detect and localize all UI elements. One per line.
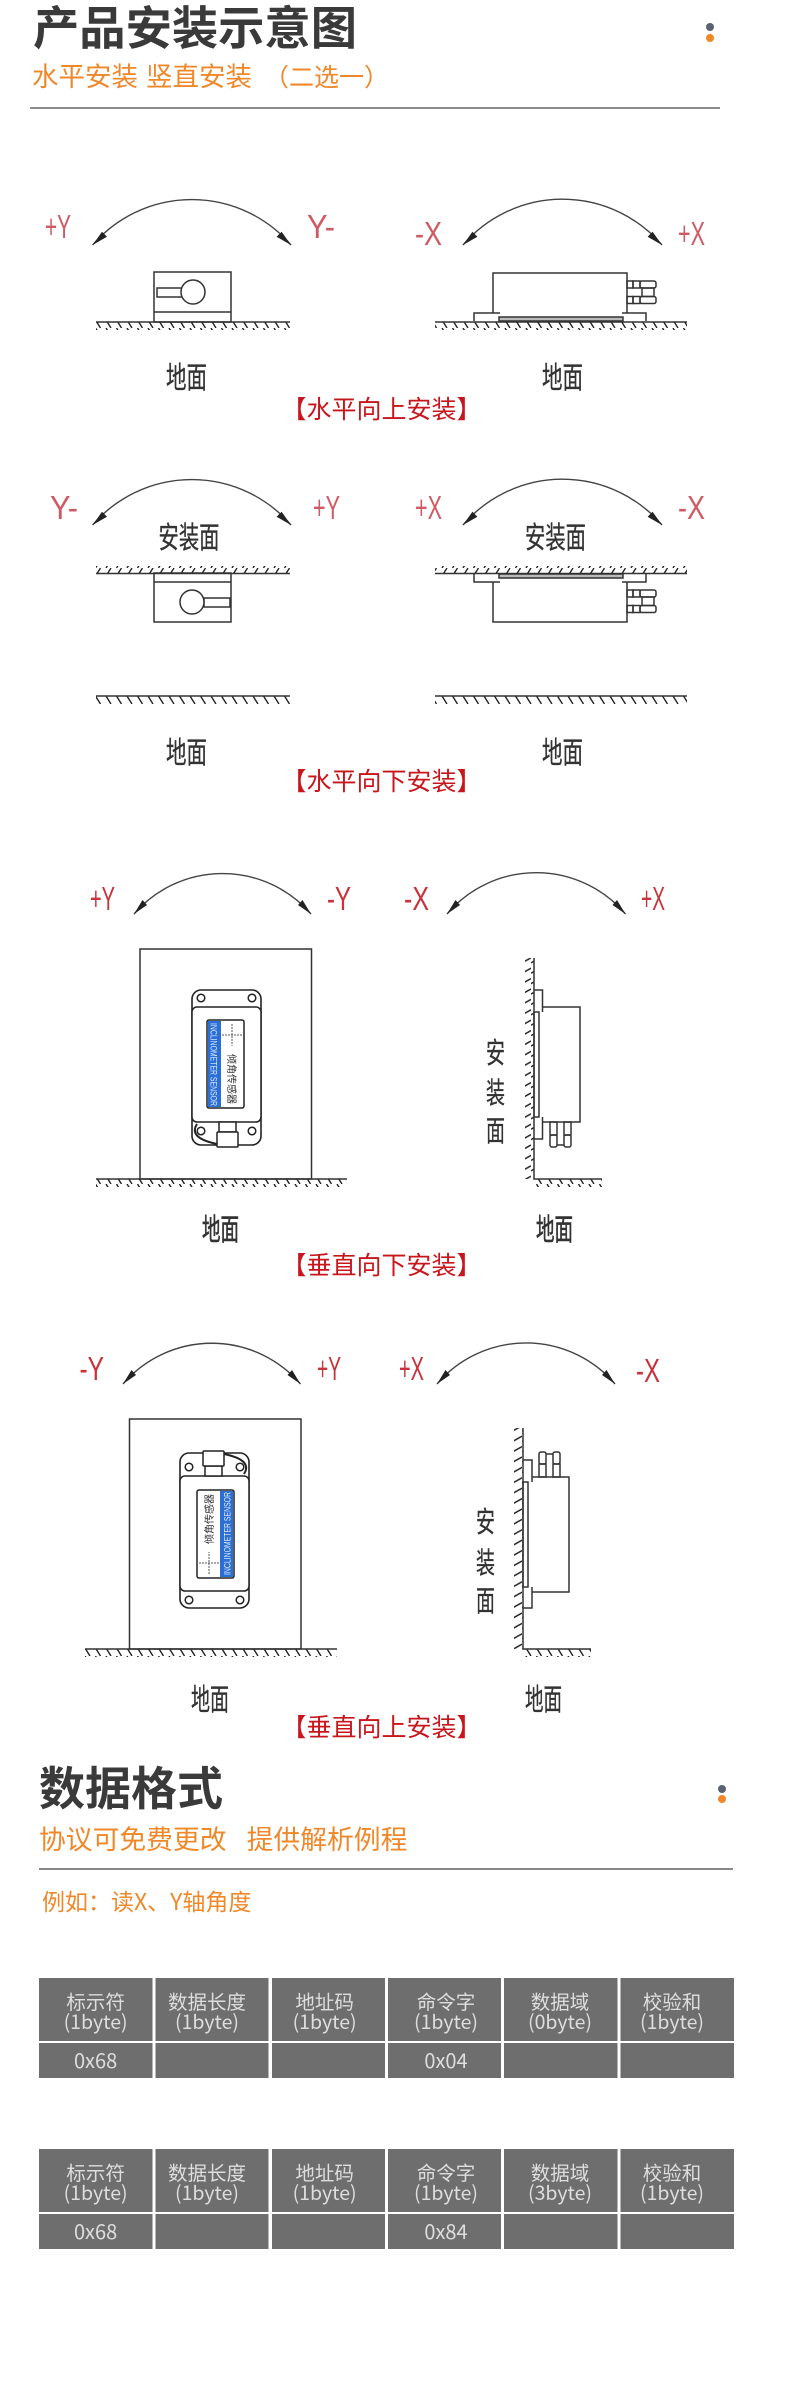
table: read command bbox=[39, 1978, 734, 2078]
mounting board bbox=[140, 949, 312, 1179]
table: read command: 数据域 bbox=[531, 1986, 589, 2015]
arrow arc: X axis bbox=[447, 873, 626, 914]
table: response: 0x68 bbox=[74, 2216, 117, 2245]
ground right bbox=[435, 696, 687, 704]
table: read command: 命令字 bbox=[417, 1986, 475, 2015]
ground left bbox=[96, 1179, 347, 1187]
arrow arc: X axis bbox=[437, 1343, 615, 1384]
table: response: 地址码 bbox=[295, 2157, 354, 2186]
table: response: 0x84 bbox=[424, 2216, 468, 2245]
title: data format: 数据格式 bbox=[39, 1753, 223, 1819]
ceiling right bbox=[435, 566, 687, 574]
label ground: 地面 bbox=[202, 1205, 239, 1249]
caption: 【水平向下安装】 bbox=[282, 762, 482, 798]
label -X: -X bbox=[678, 489, 705, 526]
label mounting surface vertical: 安 bbox=[476, 1506, 495, 1539]
table: response: (3byte) bbox=[528, 2177, 592, 2206]
table: response: (1byte) bbox=[293, 2177, 357, 2206]
wall and ground bbox=[514, 1428, 591, 1657]
sensor side view bbox=[474, 273, 656, 321]
table: response: (1byte) bbox=[414, 2177, 478, 2206]
panel: vertical down installation bbox=[90, 873, 665, 1282]
ground left bbox=[96, 696, 290, 704]
table: response: 数据域 bbox=[531, 2157, 589, 2186]
subtitle: free protocol change: 协议可免费更改 bbox=[39, 1818, 227, 1857]
arrow arc: Y axis bbox=[93, 200, 291, 245]
sensor front view: 倾角传感器 bbox=[201, 1494, 216, 1544]
arrow arc: Y axis bbox=[123, 1343, 300, 1384]
table: read command: (1byte) bbox=[414, 2006, 478, 2035]
table: response bbox=[39, 2149, 734, 2249]
label mounting surface vertical: 安 bbox=[486, 1037, 505, 1070]
label -X: -X bbox=[636, 1352, 660, 1389]
table: read command: (1byte) bbox=[175, 2006, 239, 2035]
mounting board bbox=[130, 1419, 301, 1649]
label +X: +X bbox=[678, 215, 705, 252]
sensor end view bbox=[154, 272, 231, 322]
label ground: 地面 bbox=[166, 728, 207, 772]
wall and ground bbox=[525, 958, 602, 1187]
label +Y: +Y bbox=[313, 489, 340, 526]
label mounting surface vertical: 装 bbox=[486, 1077, 505, 1110]
arrow arc: X axis bbox=[463, 199, 662, 245]
sensor front view bbox=[192, 990, 261, 1147]
subtitle: installation options: 竖直安装 bbox=[146, 55, 252, 94]
table: read command: (1byte) bbox=[64, 2006, 128, 2035]
subtitle: free protocol change: 提供解析例程 bbox=[247, 1818, 407, 1857]
table: read command: 0x68 bbox=[74, 2045, 117, 2074]
label mounting surface vertical bbox=[476, 1506, 495, 1618]
label mounting surface vertical: 面 bbox=[476, 1586, 495, 1618]
table: response: (1byte) bbox=[175, 2177, 239, 2206]
label mounting surface vertical: 装 bbox=[476, 1547, 495, 1580]
label Y-: Y- bbox=[307, 208, 335, 245]
table: response: (1byte) bbox=[64, 2177, 128, 2206]
sensor front view: INCLINOMETER SENSOR bbox=[222, 1492, 232, 1575]
label mounting surface: 安装面 bbox=[158, 513, 220, 557]
label -X: -X bbox=[415, 215, 442, 252]
caption: 【垂直向上安装】 bbox=[282, 1708, 482, 1744]
table: read command: 数据长度 bbox=[168, 1986, 246, 2015]
label ground: 地面 bbox=[542, 728, 583, 772]
sensor front view: 倾角传感器 bbox=[225, 1054, 240, 1104]
subtitle: installation options: 水平安装 bbox=[32, 55, 138, 94]
panel: horizontal down installation bbox=[50, 479, 705, 798]
ceiling left bbox=[96, 566, 290, 574]
label ground: 地面 bbox=[166, 353, 207, 397]
subtitle: installation options: （二选一） bbox=[264, 58, 389, 94]
label +X: +X bbox=[399, 1350, 424, 1387]
label ground: 地面 bbox=[542, 353, 583, 397]
ground right bbox=[435, 322, 687, 330]
sensor front view bbox=[180, 1451, 249, 1608]
sensor side view bbox=[523, 1452, 569, 1608]
ground left bbox=[85, 1649, 337, 1657]
label +Y: +Y bbox=[90, 880, 115, 917]
table: read command: (1byte) bbox=[293, 2006, 357, 2035]
table: response: 命令字 bbox=[417, 2157, 475, 2186]
caption: 【水平向上安装】 bbox=[282, 390, 482, 426]
arrow arc: X axis bbox=[463, 479, 662, 525]
label -Y: -Y bbox=[80, 1350, 104, 1387]
table: read command: (0byte) bbox=[528, 2006, 592, 2035]
table: read command: 校验和 bbox=[643, 1986, 701, 2015]
table: response: 标示符 bbox=[66, 2157, 125, 2186]
label -X: -X bbox=[404, 880, 429, 917]
label +X: +X bbox=[641, 880, 665, 917]
example note: 例如：读X、Y轴角度 bbox=[42, 1883, 251, 1917]
table: read command: (1byte) bbox=[640, 2006, 704, 2035]
table: response: (1byte) bbox=[640, 2177, 704, 2206]
table: response: 校验和 bbox=[643, 2157, 701, 2186]
ground left bbox=[96, 322, 290, 330]
label ground: 地面 bbox=[536, 1205, 573, 1249]
sensor end view bbox=[154, 573, 231, 622]
panel: horizontal up installation bbox=[45, 199, 705, 426]
sensor side view bbox=[534, 990, 580, 1147]
label ground: 地面 bbox=[191, 1675, 229, 1719]
panel: vertical up installation bbox=[80, 1343, 660, 1744]
icon: two dots bbox=[718, 1785, 726, 1803]
arrow arc: Y axis bbox=[93, 480, 291, 525]
caption: 【垂直向下安装】 bbox=[282, 1246, 482, 1282]
label mounting surface vertical: 面 bbox=[486, 1116, 505, 1148]
label ground: 地面 bbox=[525, 1675, 562, 1719]
label mounting surface: 安装面 bbox=[525, 513, 586, 557]
sensor side view bbox=[474, 574, 656, 622]
arrow arc: Y axis bbox=[134, 874, 311, 914]
table: read command: 地址码 bbox=[295, 1986, 354, 2015]
table: response: 数据长度 bbox=[168, 2157, 246, 2186]
icon: two dots bbox=[706, 23, 714, 42]
label +X: +X bbox=[415, 489, 442, 526]
label +Y: +Y bbox=[317, 1350, 341, 1387]
label mounting surface vertical bbox=[486, 1037, 505, 1148]
label -Y: -Y bbox=[327, 880, 351, 917]
table: read command: 标示符 bbox=[66, 1986, 125, 2015]
label +Y: +Y bbox=[45, 208, 71, 245]
table: read command: 0x04 bbox=[424, 2045, 468, 2074]
label Y-: Y- bbox=[50, 489, 78, 526]
sensor front view: INCLINOMETER SENSOR bbox=[208, 1023, 218, 1106]
